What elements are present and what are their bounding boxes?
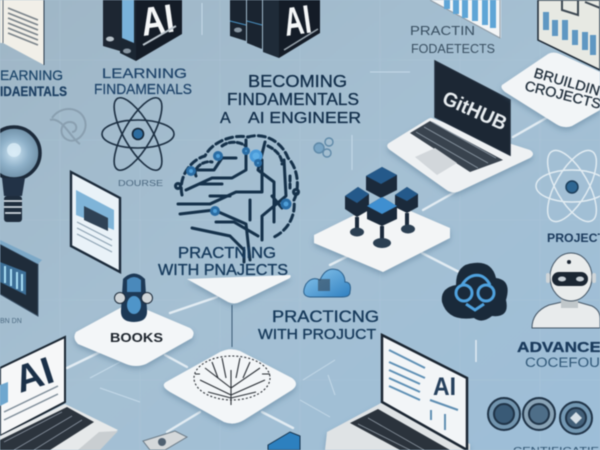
github label: GitHUB <box>439 87 510 135</box>
AI screen text: AI <box>433 373 456 401</box>
AI screen text: AI <box>10 350 59 402</box>
title: A <box>220 110 231 127</box>
book: open pages top left <box>0 0 44 65</box>
icon: certification badges <box>488 398 592 434</box>
label: course: DOURSE <box>118 179 163 188</box>
icon: small blue chip <box>268 432 300 450</box>
label: practicing with projects: PRACTNING <box>178 245 276 262</box>
laptop: AI bottom centre <box>325 335 470 450</box>
binders: AI books left <box>103 0 182 61</box>
label: advanced: COCEFOU <box>525 355 600 370</box>
label: practicing with project: WITH PROJUCT <box>258 326 376 343</box>
small gear icon <box>314 138 333 157</box>
icon: robot bust <box>532 253 600 328</box>
step panel: brain tree <box>164 349 296 424</box>
heading: learning fundamentals left <box>0 67 67 99</box>
step panel: cubes platform <box>314 167 450 272</box>
label: practicing with project <box>258 308 379 343</box>
heading: practice projects: PRACTIN <box>410 23 475 38</box>
binders: AI books centre <box>230 0 320 58</box>
heading: practice projects <box>410 23 495 56</box>
icon: robot figure <box>114 274 152 322</box>
icon: small cloud <box>304 269 350 297</box>
title <box>220 71 361 127</box>
vertical line under practicing panel <box>231 305 233 347</box>
connector lines between steps <box>67 117 548 432</box>
chart panel top right <box>538 0 600 70</box>
heading: learning fundamentals left: EARNING <box>0 67 63 83</box>
icon: circuit brain <box>176 136 298 262</box>
chart panel top centre <box>430 0 501 38</box>
icon: tree brain <box>194 356 270 405</box>
atom icon right <box>536 143 600 229</box>
title: FINDAMENTALS <box>227 89 359 109</box>
icon: small card <box>143 431 187 450</box>
label: books: BOOKS <box>110 330 163 345</box>
label: practicing with projects: WITH PNAJECTS <box>158 262 288 279</box>
panel: dark screen left <box>0 240 42 316</box>
label: advanced <box>517 339 600 370</box>
small text: left label: BN DN <box>0 318 22 325</box>
label: practicing with projects <box>158 245 288 279</box>
laptop: AI bottom left <box>0 337 118 450</box>
label: building projects: CROJECTS <box>523 77 600 112</box>
heading: learning fundamentals centre: LEARNING <box>102 65 187 81</box>
heading: learning fundamentals left: IDAENTALS <box>0 83 67 99</box>
step panel: practicing with projects <box>158 245 291 304</box>
label: building projects: BRUILDIN <box>532 65 600 99</box>
icon: cubes <box>345 167 418 248</box>
pin marker <box>475 340 477 362</box>
faint accent lines <box>90 3 410 417</box>
label: advanced: ADVANCE <box>517 339 600 356</box>
heading: learning fundamentals centre <box>94 65 192 98</box>
title: AI ENGINEER <box>248 110 361 127</box>
step panel: books <box>74 274 194 366</box>
label: practicing with project: PRACTICNG <box>272 308 379 326</box>
atom icon <box>102 91 174 177</box>
icon: dark cloud <box>442 263 508 321</box>
title: BECOMING <box>248 71 347 91</box>
heading: practice projects: FODAETECTS <box>411 41 495 56</box>
icon: light bulb <box>0 127 40 222</box>
step panel: building projects <box>501 52 600 127</box>
heading: learning fundamentals centre: FINDAMENALS <box>94 82 192 98</box>
swirl icon <box>50 109 86 144</box>
laptop: github <box>387 61 533 192</box>
icon: tablet <box>71 172 120 272</box>
